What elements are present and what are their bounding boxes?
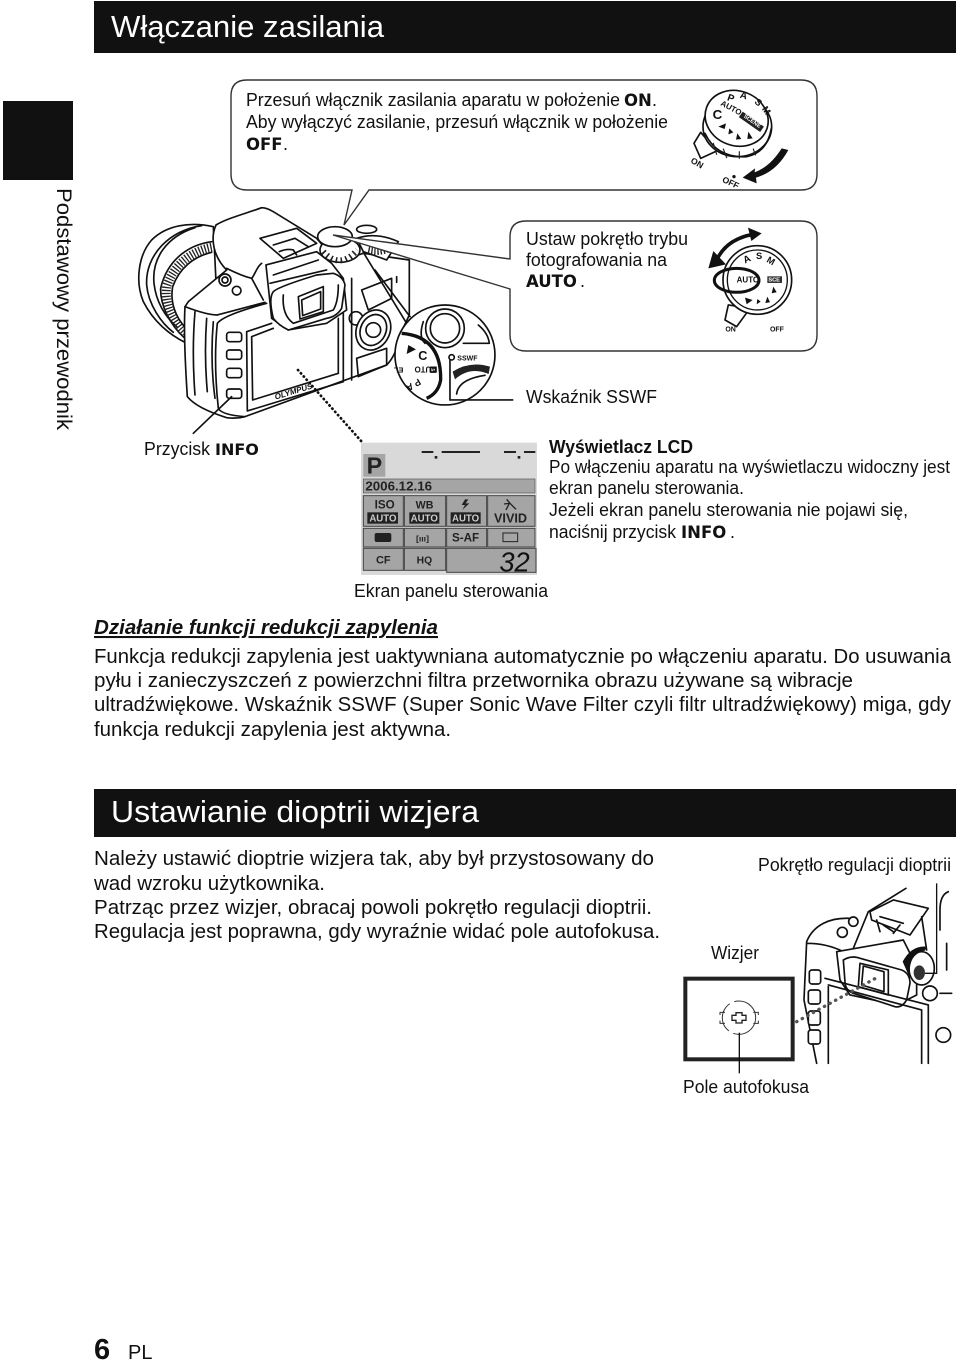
control panel screen: P <box>367 452 382 478</box>
icon: mode dial with off arrow: A <box>739 90 748 102</box>
icon: mode dial set to auto <box>708 228 792 334</box>
icon: mode dial set to auto: AUTO <box>737 275 759 284</box>
mode dial on top <box>320 238 360 262</box>
control panel screen: AUTO <box>411 514 438 525</box>
control panel screen <box>361 443 537 577</box>
heading: power on <box>94 1 956 53</box>
inset: dial and sswf: AUTO <box>414 365 437 374</box>
arrow pad <box>349 277 397 380</box>
heading: diopter <box>94 789 956 837</box>
control panel screen: ISO <box>375 499 395 512</box>
control panel screen: S-AF <box>452 532 479 545</box>
dotted link <box>797 977 877 1022</box>
text: diopter instructions <box>93 848 660 943</box>
label: af area: Pole autofokusa <box>683 1077 810 1097</box>
text: dust reduction: pyłu i zanieczyszczeń z powierzchni filtra przetwornika obrazu używane są wibracje <box>94 670 853 692</box>
control panel screen: AUTO <box>369 514 397 525</box>
icon: mode dial with off arrow: ON <box>689 155 705 171</box>
icon: mode dial set to auto: OFF <box>770 327 785 334</box>
illustration: viewfinder and camera <box>685 883 952 1073</box>
label: info button: Przycisk <box>144 439 211 459</box>
icon: mode dial set to auto: S <box>756 251 762 261</box>
text: dust reduction: funkcja redukcji zapylenia jest aktywna. <box>94 719 451 741</box>
lcd screen <box>247 313 343 411</box>
callout: power switch: ON <box>624 91 652 110</box>
leader: diopter dial <box>925 883 937 973</box>
callout: power switch: . <box>283 134 288 154</box>
callout: mode dial: Ustaw pokrętło trybu <box>526 229 688 249</box>
inset: dial and sswf: EL <box>393 366 403 375</box>
camera rear <box>804 888 952 1063</box>
icon: mode dial set to auto: M <box>765 255 777 267</box>
viewfinder frame <box>685 979 793 1073</box>
text: lcd monitor: INFO <box>681 523 726 542</box>
callout: power switch: . <box>652 90 657 110</box>
icon: mode dial with off arrow: S <box>753 97 764 108</box>
text: lcd monitor: Wyświetlacz LCD <box>549 437 693 457</box>
control panel screen: 2006.12.16 <box>365 478 432 493</box>
inset: dial and sswf: P A <box>404 377 422 393</box>
control panel screen: WB <box>416 500 434 512</box>
side tab <box>3 101 75 431</box>
callout: mode dial: fotografowania na <box>526 250 668 270</box>
icon: mode dial with off arrow: P <box>726 92 736 105</box>
page number <box>94 1334 152 1365</box>
inset: dial and sswf: SSWF <box>457 356 478 363</box>
text: dust reduction <box>94 646 952 741</box>
leader line: info button <box>193 397 232 433</box>
control panel screen: CF <box>376 555 391 567</box>
text: dust reduction: ultradźwiękowe. Wskaźnik SSWF (Super Sonic Wave Filter czyli filtr ultradźwiękowy) miga, gdy <box>94 694 951 716</box>
text: lcd monitor: . <box>730 522 735 542</box>
text: diopter instructions: wad wzroku użytkownika. <box>93 873 325 895</box>
label: info button: INFO <box>215 440 259 459</box>
subheading: dust reduction: Działanie funkcji redukcji zapylenia <box>94 616 438 639</box>
control panel screen: HQ <box>417 556 432 567</box>
text: lcd monitor: Jeżeli ekran panelu sterowania nie pojawi się, <box>549 500 908 520</box>
page number: PL <box>128 1342 152 1364</box>
text: diopter instructions: Regulacja jest poprawna, gdy wyraźnie widać pole autofokusa. <box>94 921 660 943</box>
control panel screen: VIVID <box>494 512 527 526</box>
icon: mode dial set to auto: A <box>742 253 753 266</box>
text: diopter instructions: Patrząc przez wizjer, obracaj powoli pokrętło regulacji dioptrii. <box>94 897 652 919</box>
icon: mode dial set to auto: SCE <box>768 278 780 284</box>
hot shoe <box>260 228 317 258</box>
callout: power switch: Przesuń włącznik zasilania aparatu w położenie <box>246 90 620 110</box>
label: diopter dial: Pokrętło regulacji dioptrii <box>758 855 951 875</box>
camera body <box>185 208 409 418</box>
icon: mode dial with off arrow: C <box>713 107 723 122</box>
icon: mode dial with off arrow: AUTO <box>719 99 743 117</box>
lens <box>139 224 217 342</box>
callout: mode dial: AUTO <box>526 272 577 291</box>
icon: mode dial with off arrow: M <box>760 104 773 117</box>
lcd screen: OLYMPUS <box>274 381 314 402</box>
text: dust reduction: Funkcja redukcji zapylenia jest uaktywniana automatycznie po włączeniu aparatu. Do usuwania <box>94 646 952 668</box>
callout: mode dial: . <box>580 271 585 291</box>
text: lcd monitor <box>549 437 950 542</box>
diopter dial and arrow <box>903 947 934 985</box>
callout: power switch: OFF <box>246 135 283 154</box>
control panel screen: AUTO <box>452 514 480 525</box>
icon: mode dial with off arrow: OFF <box>721 174 741 191</box>
side tab: Podstawowy przewodnik <box>52 188 75 431</box>
illustration: camera back <box>139 208 410 433</box>
label: viewfinder: Wizjer <box>711 943 759 963</box>
callout: mode dial <box>333 221 817 351</box>
label: info button <box>144 439 259 459</box>
label: control panel screen: Ekran panelu sterowania <box>354 581 549 601</box>
icon: mode dial with off arrow: SCENE <box>742 114 762 130</box>
inset: dial and sswf <box>393 305 513 405</box>
heading: power on: Włączanie zasilania <box>111 9 385 44</box>
dotted link to panel <box>298 370 362 442</box>
text: lcd monitor: naciśnij przycisk <box>549 522 677 542</box>
heading: diopter: Ustawianie dioptrii wizjera <box>111 794 480 829</box>
callout: power switch: Aby wyłączyć zasilanie, przesuń włącznik w położenie <box>246 112 668 132</box>
icon: mode dial set to auto: ON <box>725 327 736 334</box>
control panel screen: 32 <box>499 546 530 577</box>
inset: dial and sswf: C <box>418 349 427 363</box>
text: diopter instructions: Należy ustawić dioptrie wizjera tak, aby był przystosowany do <box>94 848 654 870</box>
leader lines: inset <box>363 252 410 323</box>
icon: mode dial with off arrow <box>689 82 788 191</box>
control buttons <box>227 332 242 398</box>
text: lcd monitor: ekran panelu sterowania. <box>549 478 744 498</box>
text: lcd monitor: Po włączeniu aparatu na wyświetlaczu widoczny jest <box>549 457 950 477</box>
control panel screen: [ııı] <box>416 534 429 544</box>
eyepiece <box>266 252 347 330</box>
callout: power switch <box>231 80 817 225</box>
label: sswf indicator: Wskaźnik SSWF <box>526 387 657 407</box>
